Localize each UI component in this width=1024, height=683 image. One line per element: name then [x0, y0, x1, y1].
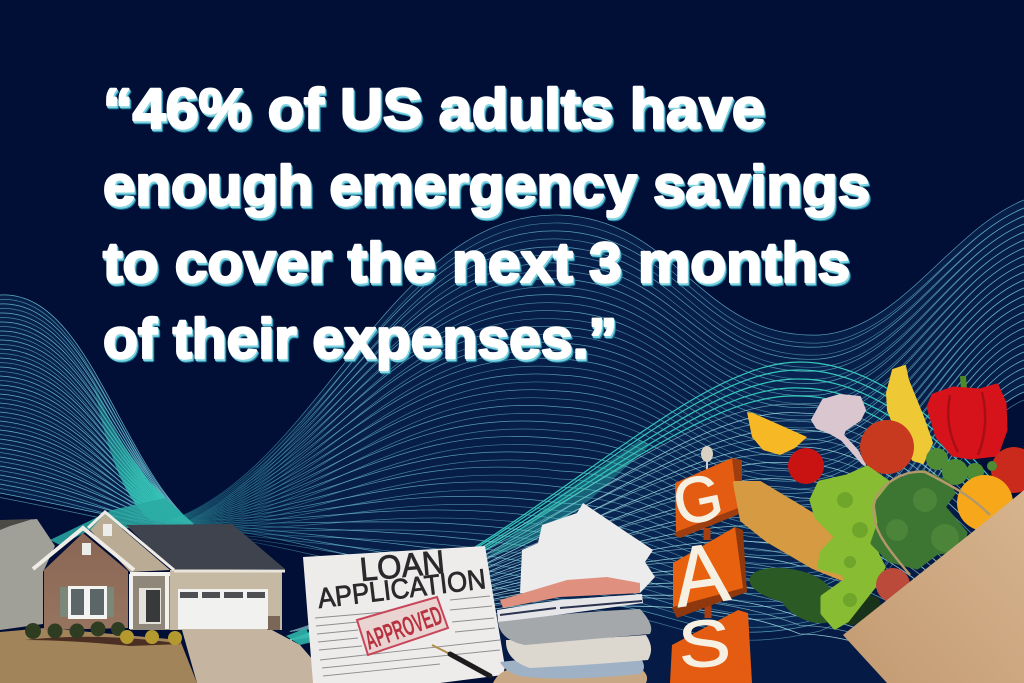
banana	[887, 366, 932, 463]
lettuce shading	[837, 492, 868, 607]
gable siding	[90, 514, 170, 572]
brick wall	[44, 533, 128, 630]
cucumbers	[747, 562, 885, 631]
A panel	[673, 527, 743, 607]
roof	[126, 524, 285, 570]
line 1: “46% of US adults have	[103, 77, 765, 141]
stripes	[500, 601, 642, 615]
fold shadow	[948, 392, 985, 455]
twine handle	[873, 472, 990, 575]
blue fold	[500, 657, 644, 679]
garlic	[812, 395, 865, 465]
baguette	[735, 483, 845, 580]
quote text	[103, 77, 870, 371]
garage windows	[180, 592, 265, 598]
form lines	[315, 596, 500, 676]
garage door	[178, 589, 268, 629]
wave: left teal glow	[92, 375, 198, 528]
wave: middle fan extra lines	[170, 208, 1024, 640]
bulb	[701, 446, 713, 462]
paper	[303, 546, 505, 683]
porch trim	[130, 574, 170, 629]
wave tint: middle fan	[170, 200, 1024, 632]
approved stamp box	[357, 597, 448, 655]
wave: lower fan teal edge	[290, 362, 1024, 640]
shutters	[60, 587, 114, 617]
photo: house	[0, 512, 313, 683]
body	[928, 385, 1006, 458]
photo: gas sign	[667, 446, 752, 683]
wave: teal band near paper	[486, 440, 650, 558]
garage wall	[170, 570, 282, 630]
pink fold	[500, 577, 640, 608]
garage stone base	[267, 616, 280, 630]
lettuce	[812, 468, 887, 627]
vents	[82, 524, 112, 555]
green bushes	[25, 622, 125, 639]
lower apple	[876, 568, 910, 602]
line 4: of their expenses.”	[103, 307, 617, 371]
gray fold	[498, 609, 651, 645]
window panes	[71, 589, 104, 615]
photo: clothes stack	[493, 503, 655, 683]
tissue papers	[520, 503, 655, 593]
pen body	[450, 654, 490, 676]
sign pole top	[706, 452, 708, 470]
stem	[963, 376, 964, 390]
wave: lower right fan	[290, 413, 1024, 683]
photo: loan application	[303, 543, 505, 683]
APPLICATION heading: APPLICATION	[316, 563, 488, 614]
wave: teal band behind house	[50, 498, 195, 545]
striped fold	[497, 594, 643, 622]
paper bag	[843, 490, 1024, 683]
lemon wedge	[747, 412, 807, 455]
line 3: to cover the next 3 months	[103, 231, 850, 295]
upper trim	[88, 512, 174, 570]
window	[68, 586, 107, 619]
A panel side	[672, 527, 747, 618]
herb sprigs	[926, 448, 997, 485]
neighbor roof	[0, 519, 33, 530]
door	[139, 588, 161, 624]
LOAN heading: LOAN	[358, 543, 446, 588]
yellow bushes	[120, 630, 182, 645]
S panel	[670, 610, 752, 683]
cherry tomato	[788, 448, 824, 484]
apple	[860, 420, 914, 474]
mulch	[25, 637, 183, 646]
letter G: G	[667, 459, 729, 540]
red pepper	[928, 376, 1006, 458]
wave: lower fan extra lines	[290, 404, 1024, 674]
broccoli	[873, 472, 965, 567]
letter A: A	[667, 524, 734, 625]
orange slice	[957, 475, 1013, 531]
right tomato	[991, 447, 1024, 493]
tan bottom	[493, 668, 647, 683]
neighbor house	[0, 519, 55, 630]
wave: large middle fan	[170, 200, 1024, 632]
approved stamp text: APPROVED	[361, 600, 446, 656]
wave: teal sliver by driveway	[286, 628, 312, 645]
G panel	[675, 458, 738, 532]
porch	[130, 573, 170, 630]
G panel side	[674, 458, 742, 538]
lawn	[0, 628, 197, 683]
door glass	[146, 590, 160, 622]
letter S: S	[676, 605, 733, 682]
broccoli light florets	[886, 488, 959, 552]
line 2: enough emergency savings	[103, 154, 870, 218]
eave	[174, 570, 285, 572]
wave tint: left fan	[0, 295, 200, 530]
wave: left fan	[0, 295, 200, 530]
cream fold	[506, 635, 651, 668]
driveway	[182, 630, 313, 683]
gable trim	[33, 528, 134, 570]
wave tint: lower fan	[290, 362, 1024, 683]
photo: groceries	[735, 366, 1024, 683]
pen	[432, 645, 466, 662]
sign connectors	[707, 528, 708, 618]
wave: left fan extra lines	[0, 299, 200, 534]
